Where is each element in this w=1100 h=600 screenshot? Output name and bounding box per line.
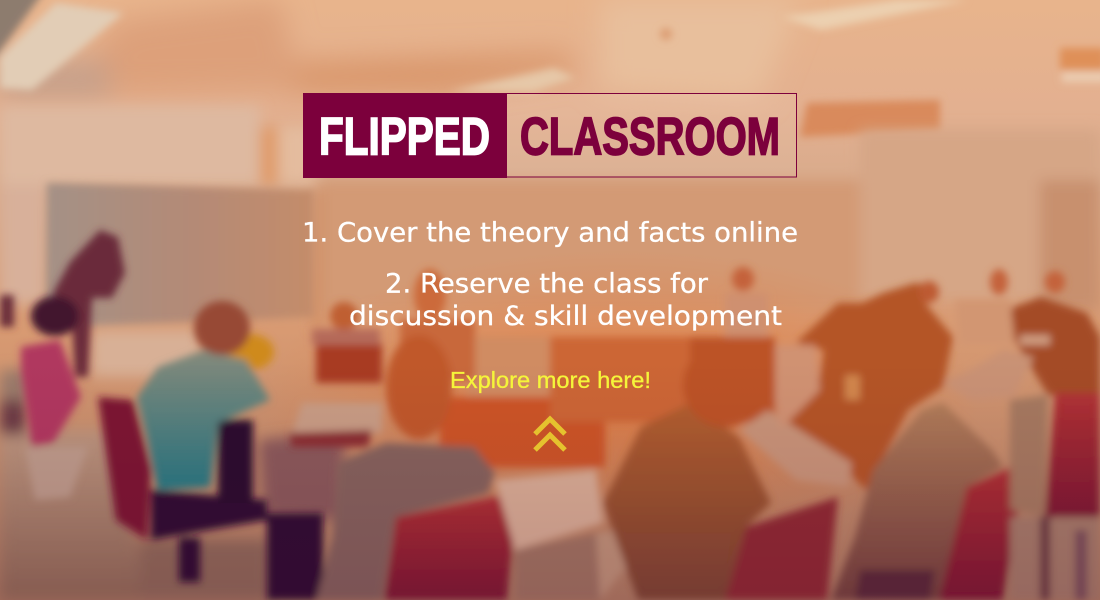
back student: [316, 343, 382, 383]
icon: double chevron up: [535, 419, 565, 450]
red chairs right: [939, 460, 1027, 600]
centre: [467, 337, 552, 403]
centre desks: [495, 470, 603, 550]
point 1: 1. Cover the theory and facts online: [302, 218, 798, 248]
student: brown shirt: [603, 403, 771, 600]
title word: flipped: FLIPPED: [319, 108, 490, 166]
teacher: [53, 230, 125, 377]
seated student: teal shirt: [98, 397, 151, 540]
point 2: 2. Reserve the class for: [385, 268, 708, 300]
red chair: [384, 492, 518, 600]
mid right group: [550, 337, 700, 422]
orange light glow: [260, 250, 980, 550]
point 2: discussion & skill development: [349, 301, 782, 332]
bag: [267, 513, 323, 600]
banner outline: [304, 94, 796, 177]
ceiling tones: [0, 0, 800, 100]
floor and desks: [0, 330, 345, 600]
title banner: [303, 93, 796, 178]
desks: [291, 403, 382, 437]
student: grey shirt: [316, 443, 495, 600]
walls and curtains: [0, 106, 1100, 328]
seated student: pink top: [31, 296, 79, 336]
student: tan shirt: [831, 403, 1003, 600]
point 2: [349, 268, 782, 332]
white desks: [943, 350, 1034, 400]
call to action: Explore more here!: [450, 367, 651, 393]
title word: classroom: CLASSROOM: [520, 108, 780, 166]
banner filled block: [303, 93, 507, 178]
whiteboard: [46, 183, 314, 327]
